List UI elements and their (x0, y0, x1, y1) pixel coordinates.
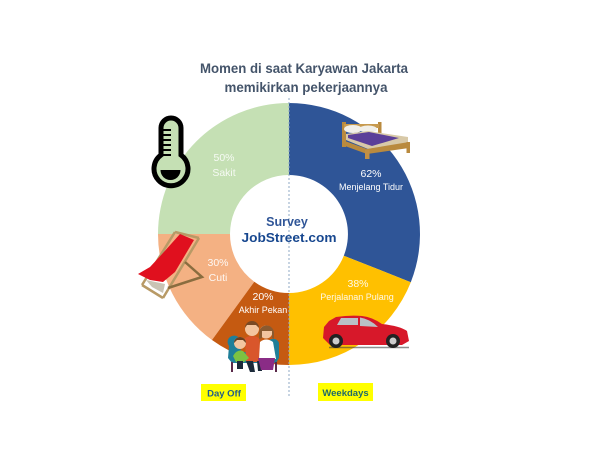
label: Sakit: Sakit (212, 167, 236, 179)
label: Cuti (207, 257, 229, 284)
icon: deck chair (138, 232, 202, 298)
title: memikirkan pekerjaannya (224, 80, 388, 95)
label: Akhir Pekan (239, 291, 287, 315)
label: Sakit (212, 152, 236, 179)
legend: Weekdays: Weekdays (322, 388, 369, 399)
legend: Day Off: Day Off (207, 388, 242, 400)
title: Momen di saat Karyawan Jakarta (200, 61, 408, 76)
label: Sakit: 50% (213, 152, 235, 164)
father (245, 336, 262, 362)
child (233, 351, 249, 362)
label: Akhir Pekan: Akhir Pekan (239, 305, 287, 315)
donut chart (158, 103, 420, 365)
icon: bed (342, 122, 410, 159)
segment: Cuti (158, 234, 254, 340)
label: Perjalanan Pulang: 38% (347, 278, 369, 290)
sofa (228, 336, 279, 363)
label: Perjalanan Pulang: Perjalanan Pulang (320, 292, 394, 302)
divider line (288, 98, 290, 398)
center label: survey: Survey (266, 215, 308, 229)
icon: family (228, 321, 279, 372)
label: Akhir Pekan: 20% (252, 291, 274, 303)
label: Menjelang Tidur (339, 168, 403, 192)
segment: Sakit (158, 103, 289, 234)
center label: survey (242, 215, 336, 245)
legend: Day Off (201, 384, 246, 401)
label: Menjelang Tidur: 62% (360, 168, 382, 180)
legend: Weekdays (318, 383, 373, 401)
label: Cuti: 30% (207, 257, 229, 269)
icon: thermometer (154, 118, 188, 186)
center label: survey: JobStreet.com (242, 230, 336, 245)
segment: Perjalanan Pulang (289, 256, 411, 365)
label: Menjelang Tidur: Menjelang Tidur (339, 182, 403, 192)
title (200, 61, 408, 95)
segment: Menjelang Tidur (289, 103, 420, 282)
icon: red car (323, 316, 409, 348)
label: Cuti: Cuti (209, 272, 227, 284)
label: Perjalanan Pulang (320, 278, 394, 302)
mother (259, 340, 276, 359)
segment: Akhir Pekan (212, 282, 289, 365)
